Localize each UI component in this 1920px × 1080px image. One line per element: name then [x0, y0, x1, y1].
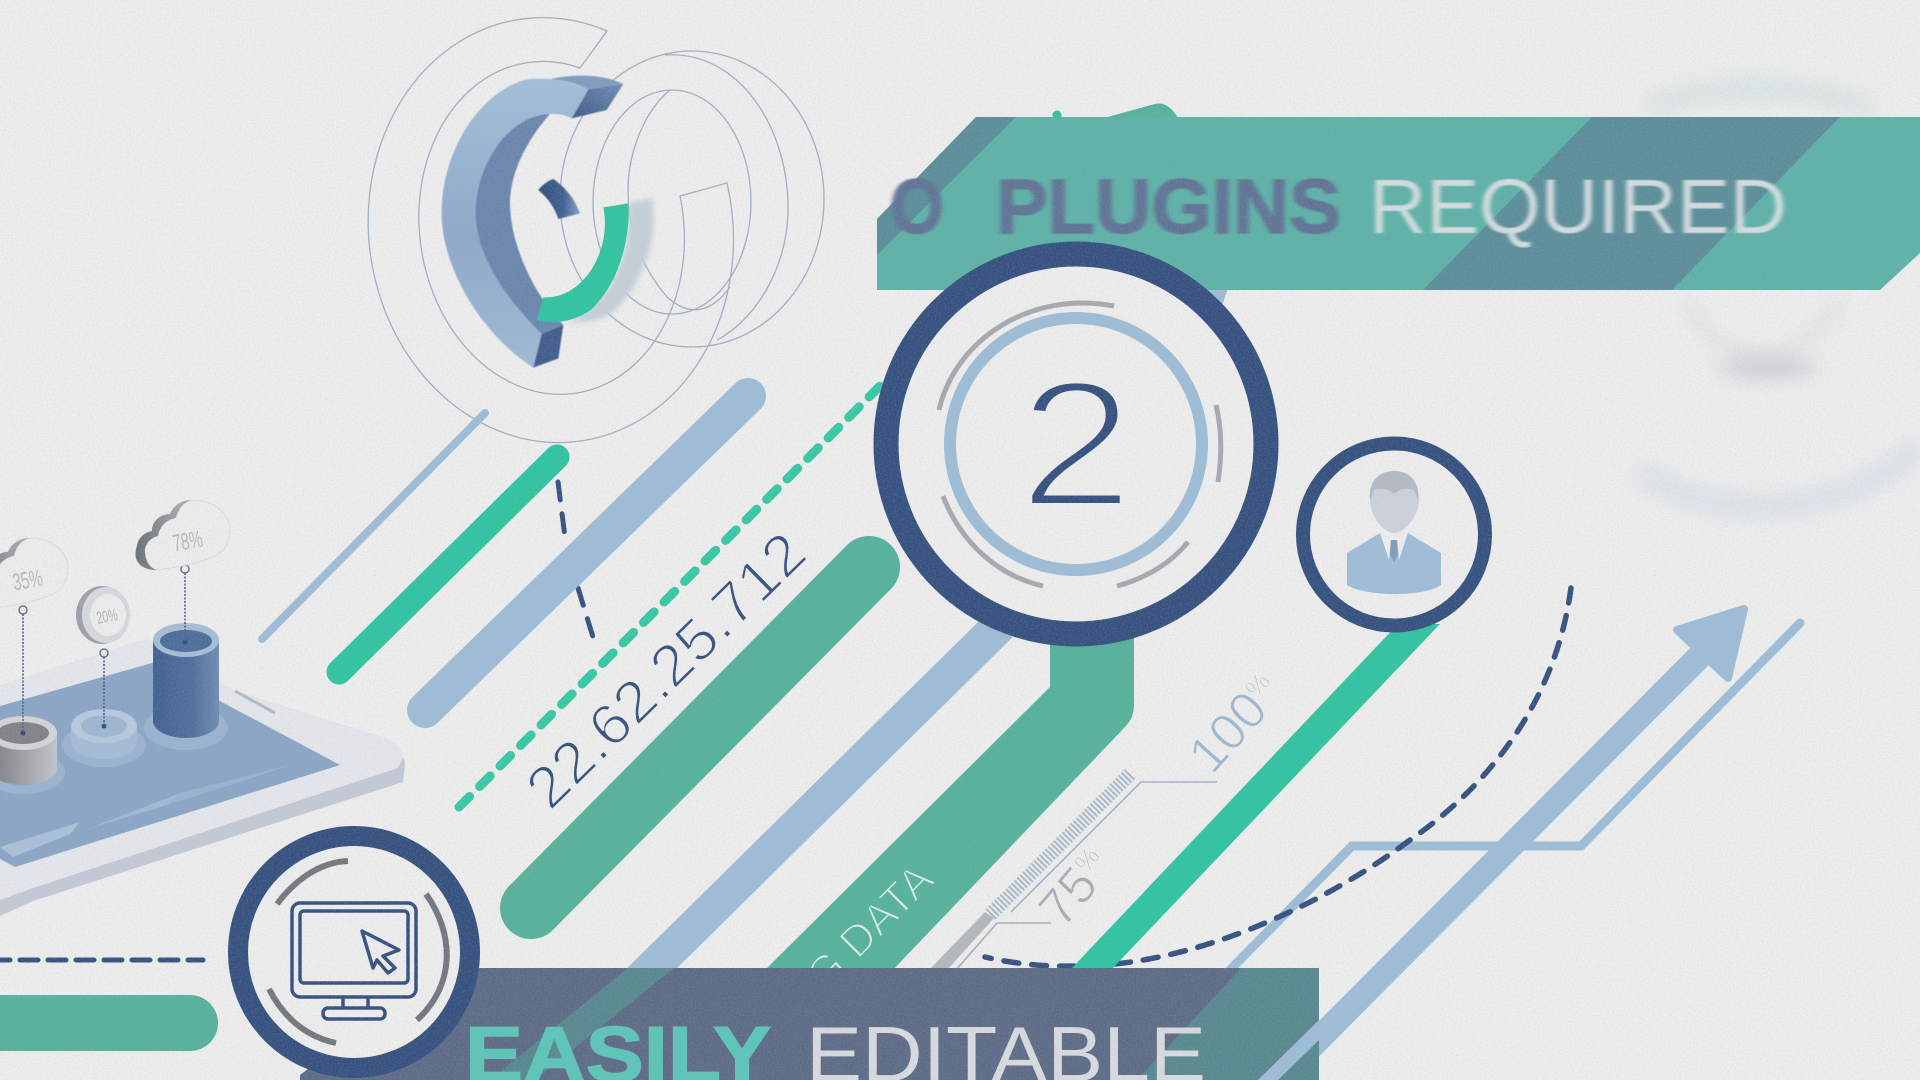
dashed curve: [985, 588, 1571, 966]
cloud callout 35%: 35%: [11, 565, 45, 597]
green chevron band with label: [760, 600, 1134, 1000]
icon: monitor and cursor: [292, 903, 416, 1019]
hatched progress gauge with percentage labels: 75: [1028, 856, 1109, 938]
dashed line left: [0, 958, 203, 962]
cloud callout 78%: [136, 500, 230, 570]
cloud callout 78%: 78%: [171, 526, 205, 558]
hatched progress gauge with percentage labels: 100: [1178, 681, 1279, 784]
top teal banner: O: [890, 164, 944, 250]
hatched progress gauge with percentage labels: [929, 664, 1294, 970]
top teal banner: PLUGINS: [996, 164, 1341, 250]
person badge: [1303, 444, 1485, 626]
3D C ring emblem: [442, 76, 654, 368]
number string: 22.62.25.712: [514, 520, 819, 821]
big number badge: 2: [1018, 344, 1134, 545]
diagonal bars: [262, 382, 1000, 980]
bottom slate banner: [300, 968, 1319, 1080]
top teal banner: [877, 104, 1920, 318]
hatched progress gauge with percentage labels: %: [1068, 841, 1106, 878]
cylinder chart bar: 35%: [0, 606, 57, 785]
bright green bar to person badge: [1070, 624, 1440, 970]
big number badge: [886, 254, 1266, 634]
donut callout 20%: 20%: [95, 605, 119, 628]
cloud callout 35%: [0, 538, 68, 608]
green chevron band with label: G DATA: [797, 854, 944, 1000]
growth arrow: [1240, 609, 1744, 1080]
thin outline wireframe rings: [368, 18, 824, 443]
cylinder chart bar: 78%: [153, 565, 219, 738]
hatched progress gauge with percentage labels: %: [1239, 666, 1277, 703]
thin blue elbow line: [1225, 623, 1800, 975]
isometric tablet: [0, 639, 405, 916]
donut callout 20%: [76, 586, 130, 644]
faint out-of-focus rings at right: [1640, 88, 1920, 507]
green pill left: [0, 995, 218, 1051]
dashed connector behind blue bar: [558, 482, 593, 637]
monitor badge: [238, 836, 470, 1068]
ring chart bar: 20%: [71, 649, 137, 759]
top teal banner: REQUIRED: [1369, 164, 1787, 250]
